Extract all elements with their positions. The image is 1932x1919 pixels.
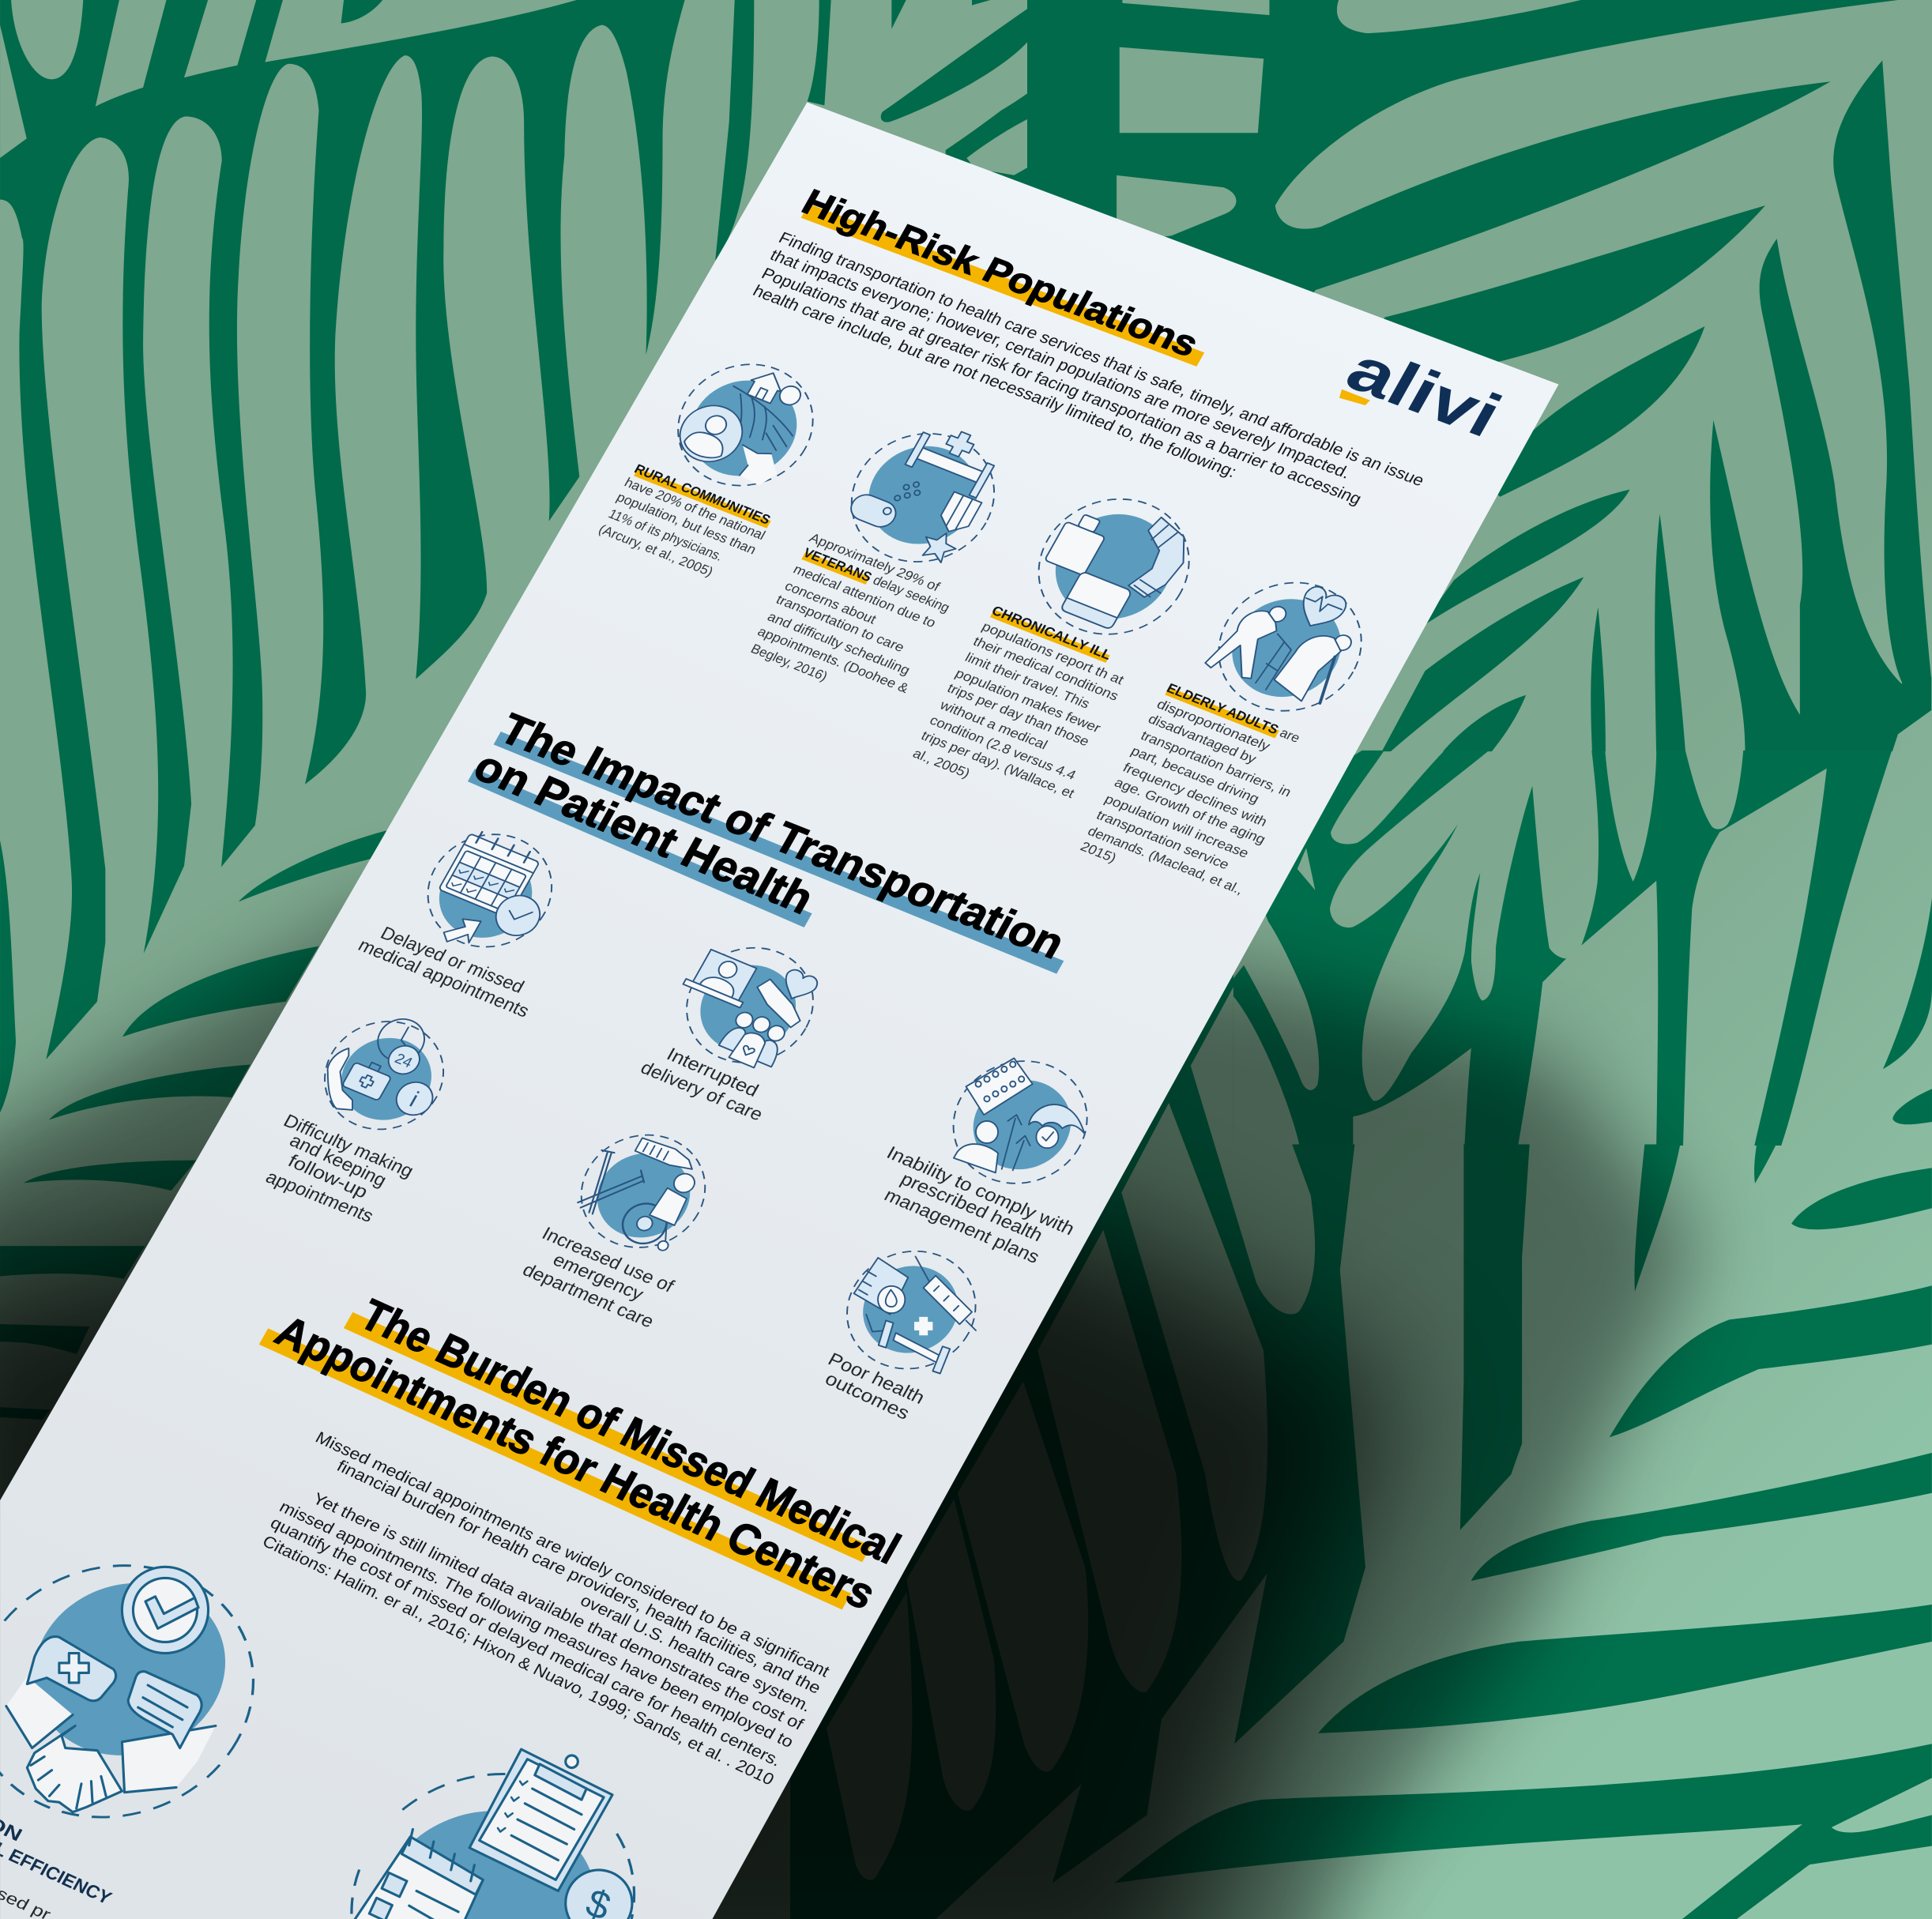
text block: chronically ill: limit their travel. This [962,649,1093,711]
icon: phone and first aid: i [405,1087,423,1112]
label: inability to comply with health plans: prescribed health [898,1168,1046,1245]
section: burden of missed appointments [0,1285,909,1919]
text block: chronically ill: their medical conditions [970,634,1121,704]
text block: elderly adults: age. Growth of the aging [1112,774,1268,847]
text fragment: cropped section label [0,1812,115,1919]
icon: phone and first aid [304,1000,467,1146]
text block: rural communities: have 20% of the national [622,474,768,543]
label: interrupted delivery of care: delivery of care [638,1057,766,1124]
shadow cast across the background [0,899,1700,1919]
heading: high-risk populations: High-Risk Populations [796,182,1206,364]
heading: the impact of transportation on patient health: on Patient Health [466,741,822,923]
icon: elderly adults [1194,563,1386,731]
text block: elderly adults: transportation service [1094,807,1232,872]
label: delayed or missed appointments: Delayed or missed [377,923,528,997]
leaf: lower right frond [790,948,1932,1919]
text block: elderly adults [1078,680,1303,897]
text block: intro paragraph: health care include, but are not necessarily limited to, the following: [750,282,1240,481]
heading: the impact of transportation on patient health: The Impact of Transportation [492,704,1073,968]
label: poor health outcomes: outcomes [822,1368,913,1424]
text block: burden paragraphs: financial burden for health care providers, health facilities, and the [333,1457,823,1698]
text block: chronically ill: without a medical [936,697,1050,752]
text block: burden paragraphs: Missed medical appointments are widely considered to be a significant [312,1428,833,1681]
icon: phone and first aid: 24 [392,1050,416,1071]
text block: rural communities: RURAL COMMUNITIES [632,461,774,528]
text block: elderly adults: part, because driving [1128,743,1262,807]
logo: alivi: alivi [1335,335,1512,450]
text block: elderly adults: ELDERLY ADULTS are [1164,680,1303,746]
text block: chronically ill: condition (2.8 versus 4.4 [927,712,1079,783]
text block: chronically ill: population makes fewer [953,665,1104,736]
text block: intro paragraph: that impacts everyone; however, certain populations are more severely Impacted. [767,246,1354,482]
text block: rural communities: 11% of its physicians. [606,506,726,564]
label: difficulty making follow-up appointments: appointments [262,1167,377,1226]
text block: burden paragraphs: Yet there is still limited data available that demonstrates the cost of [310,1490,807,1734]
label: difficulty making follow-up appointments [262,1110,417,1226]
text block: veterans: and difficulty scheduling [765,608,913,678]
text block: intro paragraph: Populations that are at greater risk for facing transportation as a barrier to accessing [759,265,1365,508]
text block: veterans: concerns about [782,578,879,627]
text block: veterans: Approximately 29% of [807,530,943,594]
leaf: lower left blades [0,830,387,1420]
label: inability to comply with health plans: management plans [881,1184,1043,1267]
text block: burden paragraphs: quantify the cost of missed or delayed medical care for health centers. [267,1514,784,1770]
label: difficulty making follow-up appointments: and keeping [286,1130,390,1191]
text block: veterans: VETERANS delay seeking [800,544,953,615]
text block: elderly adults: disadvantaged by [1146,711,1260,766]
text block: chronically ill [910,603,1127,801]
label: poor health outcomes [822,1349,928,1424]
label: delayed or missed appointments: medical appointments [355,935,533,1021]
label: difficulty making follow-up appointments: Difficulty making [281,1110,417,1181]
text block: rural communities: population, but less than [614,489,759,557]
heading: the burden of missed medical appointments for health centers: Appointments for Health Centers [268,1306,884,1619]
leaf: top centre mass [808,0,1132,316]
icon: calendar and clock [404,817,574,969]
icon: veterans [827,406,1023,581]
text block: burden paragraphs: Citations: Halim. er al., 2016; Hixon & Nuavo, 1999; Sands, et al. . 2010 [259,1533,777,1789]
text block: veterans: Begley, 2016) [748,641,830,684]
label: poor health outcomes: Poor health [825,1349,928,1408]
text block: chronically ill: populations report th at [979,619,1127,687]
text block: intro paragraph: Finding transportation to health care services that is safe, timely, and affordable is an issue [775,229,1427,490]
label: interrupted delivery of care: Interrupted [664,1044,763,1101]
icon: pills, umbrella and person [930,1041,1110,1203]
text block: elderly adults: disproportionately [1154,696,1274,754]
icon: iv bag, syringe and bed [824,1232,998,1387]
text block: elderly adults: 2015) [1078,838,1120,865]
icon: clipboard, calendar and cost [302,1733,684,1919]
leaf: upper right frond [1027,0,1931,785]
text block: burden paragraphs [259,1428,833,1789]
label: inability to comply with health plans: Inability to comply with [883,1142,1078,1239]
label: increased use of emergency department care: Increased use of [539,1223,678,1296]
text block: chronically ill: trips per day than those [945,680,1092,749]
label: increased use of emergency department care [519,1223,678,1331]
label: increased use of emergency department care: department care [519,1259,657,1331]
text block: elderly adults: transportation barriers, in [1138,728,1294,800]
panel: paper sheet [0,102,1558,1919]
text block: burden paragraphs: overall U.S. health care system. [577,1591,814,1716]
label: increased use of emergency department care: emergency [550,1249,647,1304]
text block: veterans: transportation to care [774,592,907,655]
text block: veterans: appointments. (Doohee & [755,623,912,696]
text block: elderly adults: population will increase [1102,791,1252,861]
leaf: upper left fronds [0,0,754,1059]
icon: rural communities [654,345,837,504]
text block: rural communities [596,461,774,579]
text block: chronically ill: al., 2005) [910,745,973,781]
text block: chronically ill: CHRONICALLY ILL [989,603,1114,663]
section: high-risk populations [596,182,1427,897]
label: difficulty making follow-up appointments: follow-up [284,1150,371,1202]
leaf: central frond behind the sheet [1233,751,1932,1146]
icon: handshake with speech bubbles [0,1526,303,1857]
label: inability to comply with health plans [881,1142,1078,1267]
text block: veterans: medical attention due to [791,561,939,630]
text block: chronically ill: trips per day). (Wallace, et [919,728,1078,801]
icon: crutches and wheelchair [559,1117,727,1266]
text block: veterans [748,530,953,696]
text block: rural communities: (Arcury, et al., 2005) [596,521,716,579]
section: impact on patient health [262,704,1110,1424]
text block: elderly adults: demands. (Maclead, et al., [1085,823,1246,897]
text block: elderly adults: frequency declines with [1120,759,1270,830]
icon: chronically ill [1012,478,1215,655]
heading: the burden of missed medical appointments for health centers: The Burden of Missed Medical [352,1289,909,1573]
text block: burden paragraphs: missed appointments. The following measures have been employed to [277,1498,797,1752]
icon: interrupted care [657,926,835,1081]
